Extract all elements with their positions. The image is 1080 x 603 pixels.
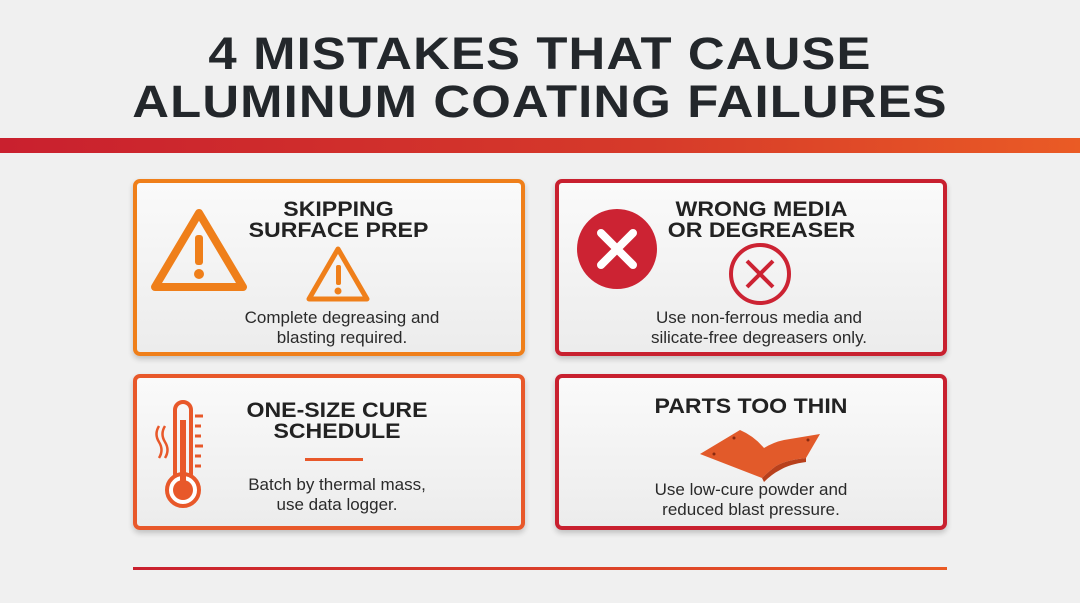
description: Use non-ferrous media and bbox=[656, 308, 862, 327]
icon: small x circle bbox=[729, 243, 791, 305]
heading: WRONG MEDIA bbox=[676, 198, 847, 221]
header bar bbox=[0, 138, 1080, 153]
heading: SURFACE PREP bbox=[249, 219, 428, 242]
heading: SKIPPING bbox=[283, 198, 394, 221]
description: Use low-cure powder and bbox=[655, 480, 847, 499]
heading bbox=[668, 198, 855, 242]
icon: large warning bbox=[151, 209, 247, 291]
title bbox=[132, 28, 948, 127]
description: Complete degreasing and bbox=[245, 308, 439, 327]
icon: thermometer bbox=[155, 400, 203, 508]
description: blasting required. bbox=[277, 328, 407, 347]
heading: OR DEGREASER bbox=[668, 219, 855, 242]
icon: small warning bbox=[306, 246, 370, 302]
description bbox=[248, 475, 426, 514]
description bbox=[655, 480, 847, 519]
description bbox=[651, 308, 867, 347]
divider accent bbox=[305, 458, 363, 461]
panel: parts too thin bbox=[555, 374, 947, 530]
description: silicate-free degreasers only. bbox=[651, 328, 867, 347]
description: reduced blast pressure. bbox=[662, 500, 840, 519]
heading: PARTS TOO THIN bbox=[655, 395, 847, 418]
panel: skipping surface prep bbox=[133, 179, 525, 356]
heading bbox=[247, 399, 427, 443]
heading bbox=[249, 198, 428, 242]
icon: large x circle bbox=[577, 209, 657, 289]
description bbox=[245, 308, 439, 347]
heading: SCHEDULE bbox=[273, 420, 401, 443]
bottom line bbox=[133, 567, 947, 570]
title: ALUMINUM COATING FAILURES bbox=[132, 76, 948, 127]
heading: ONE-SIZE CURE bbox=[247, 399, 427, 422]
panel: one-size cure bbox=[133, 374, 525, 530]
description: use data logger. bbox=[276, 495, 397, 514]
panel: wrong media bbox=[555, 179, 947, 356]
description: Batch by thermal mass, bbox=[248, 475, 426, 494]
icon: thin bent sheet bbox=[700, 430, 820, 482]
title: 4 MISTAKES THAT CAUSE bbox=[208, 28, 872, 79]
